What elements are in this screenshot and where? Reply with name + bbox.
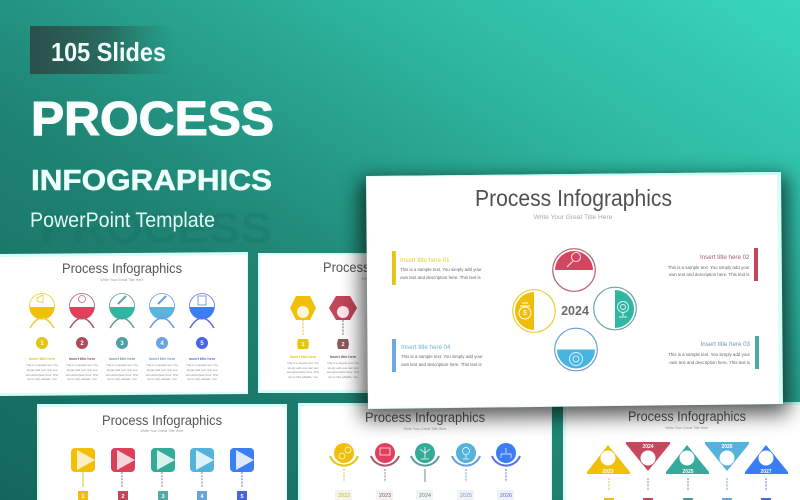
play tile 4 xyxy=(190,448,214,500)
step 5: Insert title here xyxy=(189,357,215,361)
triangle 2025: 2025 xyxy=(682,469,694,475)
hexagon step 1: simply add your own text xyxy=(288,366,319,370)
main slide drop shadow xyxy=(360,176,789,419)
step 1 xyxy=(26,294,59,381)
step 2: Insert title here xyxy=(69,357,95,361)
slide 2 subtitle: Write Your Great Title Here xyxy=(362,277,404,281)
triangle 2024 xyxy=(626,442,670,500)
step 4: text is fully editable. You xyxy=(147,377,177,381)
circle: red key, top xyxy=(553,249,595,291)
triangle 2024: 2024 xyxy=(642,444,654,450)
main subtitle: Write Your Great Title Here xyxy=(534,214,613,221)
play tile 4: 4 xyxy=(200,494,204,500)
step 5: 5 xyxy=(200,341,204,347)
center year 2024: 2024 xyxy=(561,304,589,318)
node 2025 xyxy=(452,443,480,500)
step 1: simply add your own text xyxy=(27,368,58,372)
text block 03: Insert title here 03 xyxy=(700,341,751,348)
step 2: simply add your own text xyxy=(67,368,98,372)
text block 01: Insert title here 01 xyxy=(400,257,450,264)
hexagon step 2: text is fully editable. You xyxy=(328,375,358,379)
triangle 2026 xyxy=(705,442,749,500)
circle: teal target, right xyxy=(594,287,636,330)
step 2: This is a sample text. You xyxy=(66,363,98,367)
badge: 105 Slides: 105 Slides xyxy=(51,37,166,67)
triangle 2023 xyxy=(587,445,630,500)
triangle 2023: 2023 xyxy=(602,469,614,475)
slide 5 title: Process Infographics xyxy=(628,409,746,424)
triangle 2025 xyxy=(666,445,709,500)
step 3: 3 xyxy=(120,341,124,347)
step 3: Insert title here xyxy=(109,357,135,361)
node 2023: 2023 xyxy=(379,493,391,499)
badge: 105 Slides xyxy=(30,26,172,74)
hexagon step 2: simply add your own text xyxy=(328,366,359,370)
ghost heading reflection: PROCESS xyxy=(40,204,272,253)
play tile 3 xyxy=(151,448,175,500)
step 4: This is a sample text. You xyxy=(146,363,178,367)
slide 1 subtitle: Write Your Great Title Here xyxy=(101,278,143,282)
hexagon step 2: and description here. This xyxy=(327,370,360,374)
hexagon step 1: and description here. This xyxy=(287,370,320,374)
hexagon step 2 xyxy=(327,296,360,379)
step 3: and description here. This xyxy=(106,373,139,377)
node 2026: 2026 xyxy=(500,493,512,499)
triangle 2027 xyxy=(745,445,788,500)
circle: yellow money bag, left xyxy=(513,290,555,332)
node 2026 xyxy=(492,443,520,500)
text block 02: own text and description here. This text is xyxy=(669,272,750,277)
play tile 3: 3 xyxy=(161,494,165,500)
node 2024: 2024 xyxy=(419,493,431,499)
step 5: simply add your own text xyxy=(187,368,218,372)
step 4: 4 xyxy=(160,341,164,347)
text block 03 xyxy=(668,336,759,369)
hexagon step 1 xyxy=(287,296,320,379)
node 2024 xyxy=(411,443,439,500)
slide 3: rounded play squares xyxy=(37,404,287,500)
play tile 5: 5 xyxy=(240,494,244,500)
subheading: PowerPoint Template: PowerPoint Template xyxy=(30,209,215,232)
step 3 xyxy=(106,294,139,381)
text block 04 xyxy=(392,339,483,372)
play tile 1: 1 xyxy=(81,494,85,500)
play tile 1 xyxy=(71,448,95,500)
main title: Process Infographics xyxy=(475,185,672,211)
heading: PROCESS: PROCESS xyxy=(31,93,274,146)
step 3: simply add your own text xyxy=(107,368,138,372)
step 3: text is fully editable. You xyxy=(107,377,137,381)
text block 02: Insert title here 02 xyxy=(700,254,750,261)
node 2025: 2025 xyxy=(460,493,472,499)
step 2: text is fully editable. You xyxy=(67,377,97,381)
slide 3 title: Process Infographics xyxy=(102,413,222,428)
step 3: This is a sample text. You xyxy=(106,363,138,367)
step 1: and description here. This xyxy=(26,373,59,377)
hexagon step 1: This is a sample text. You xyxy=(287,361,319,365)
play tile 5 xyxy=(230,448,254,500)
slide 2: hexagon steps xyxy=(258,253,443,393)
step 5: and description here. This xyxy=(186,373,219,377)
triangle 2026: 2026 xyxy=(721,444,733,450)
text block 01: This is a sample text. You simply add your xyxy=(400,267,482,272)
step 4: Insert title here xyxy=(149,357,175,361)
main slide: 2024 process xyxy=(366,172,783,409)
text block 01: own text and description here. This text is xyxy=(400,275,482,280)
step 4 xyxy=(146,294,179,381)
hexagon step 2: This is a sample text. You xyxy=(327,361,359,365)
hexagon step 1: 1 xyxy=(301,342,305,348)
slide 5 subtitle: Write Your Great Title Here xyxy=(666,426,708,430)
hexagon step 1: Insert title here xyxy=(290,355,316,359)
step 5: text is fully editable. You xyxy=(187,377,217,381)
slide 3 subtitle: Write Your Great Title Here xyxy=(141,429,183,433)
hexagon step 2: Insert title here xyxy=(330,355,356,359)
text block 02 xyxy=(668,248,758,281)
triangle 2027: 2027 xyxy=(760,469,772,475)
step 2: 2 xyxy=(80,341,84,347)
step 1: text is fully editable. You xyxy=(27,377,57,381)
text block 04: own text and description here. This text is xyxy=(401,362,483,367)
hexagon step 2: 2 xyxy=(341,342,345,348)
text block 04: Insert title here 04 xyxy=(401,344,451,351)
text block 04: This is a sample text. You simply add your xyxy=(401,354,483,359)
step 4: simply add your own text xyxy=(147,368,178,372)
step 2 xyxy=(66,294,99,381)
heading: INFOGRAPHICS: INFOGRAPHICS xyxy=(31,165,272,197)
text block 03: This is a sample text. You simply add your xyxy=(668,352,751,357)
slide 4 title: Process Infographics xyxy=(365,410,485,425)
text block 03: own text and description here. This text is xyxy=(669,360,751,365)
slide 1 title: Process Infographics xyxy=(62,261,182,276)
step 5 xyxy=(186,294,219,381)
hexagon step 1: text is fully editable. You xyxy=(288,375,318,379)
text block 01 xyxy=(392,251,482,285)
slide 4 subtitle: Write Your Great Title Here xyxy=(404,427,446,431)
step 5: This is a sample text. You xyxy=(186,363,218,367)
circle: yellow money bag, left: $ xyxy=(523,310,527,317)
play tile 2: 2 xyxy=(121,494,125,500)
slide 2 title: Process Infographics xyxy=(323,260,443,275)
node 2022: 2022 xyxy=(338,493,350,499)
slide 1: hourglass steps xyxy=(0,252,248,396)
node 2022 xyxy=(330,443,358,500)
slide 4: timeline circles xyxy=(298,403,552,500)
step 4: and description here. This xyxy=(146,373,179,377)
text block 02: This is a sample text. You simply add your xyxy=(668,265,750,270)
step 1: 1 xyxy=(40,341,44,347)
step 2: and description here. This xyxy=(66,373,99,377)
step 1: This is a sample text. You xyxy=(26,363,58,367)
circle: blue target, bottom xyxy=(555,328,597,371)
slide 5: triangle timeline xyxy=(563,402,800,500)
play tile 2 xyxy=(111,448,135,500)
step 1: Insert title here xyxy=(29,357,55,361)
node 2023 xyxy=(371,443,399,500)
